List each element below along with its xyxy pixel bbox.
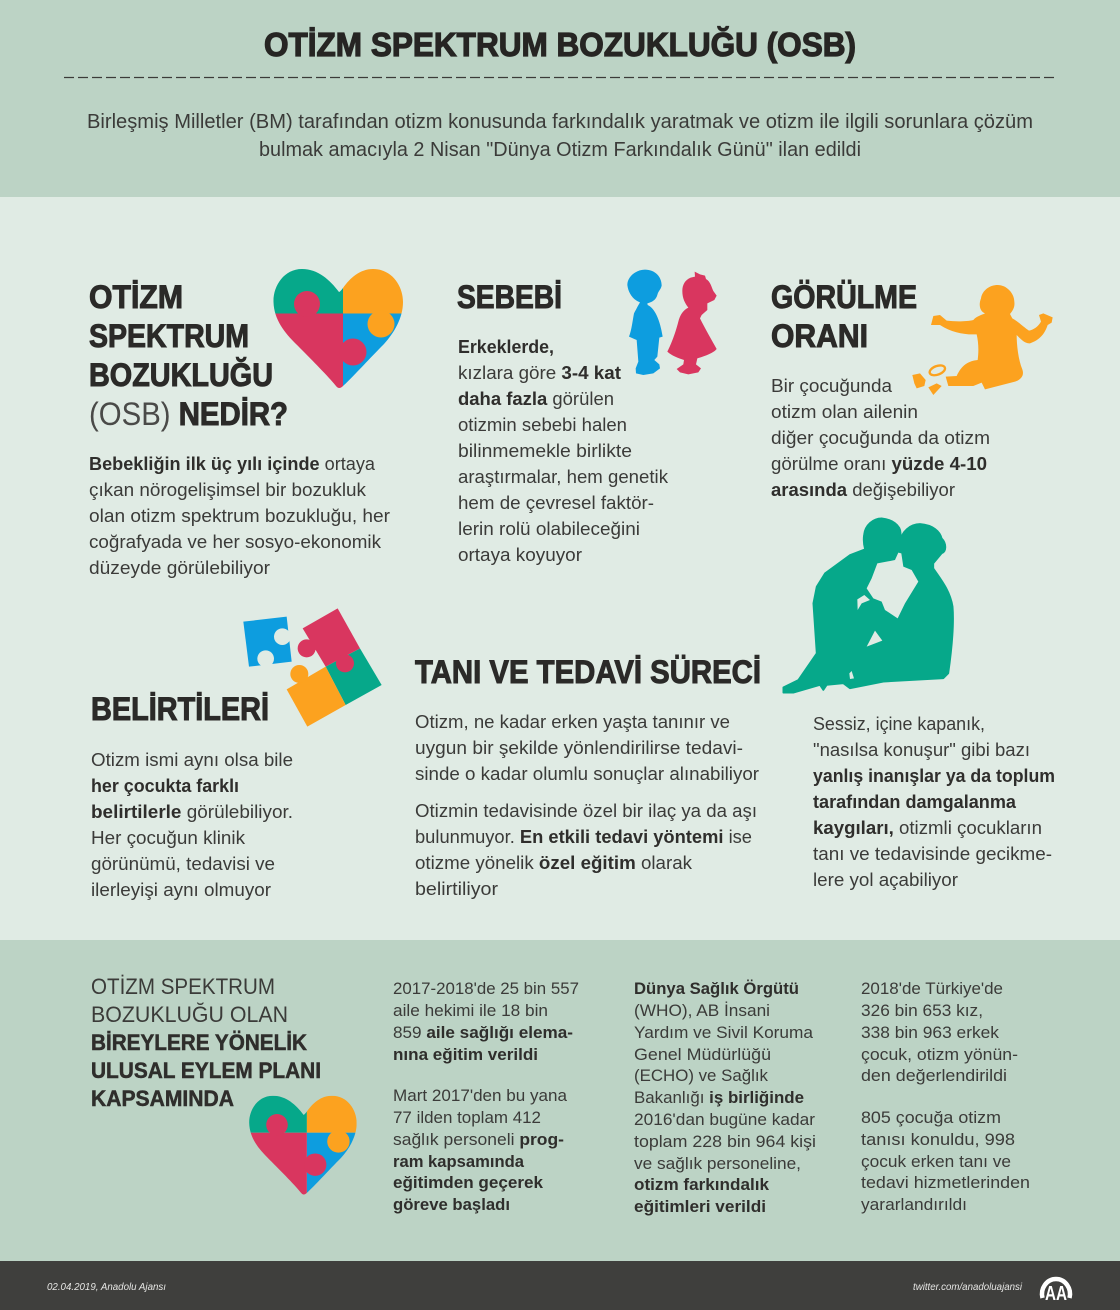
- text: sebebi: [458, 336, 669, 565]
- heading: tanı ve tedavi süreci: TANI VE TEDAVİ SÜRECİ: [415, 654, 761, 690]
- text: yanlış inanışlar: "nasılsa konuşur" gibi bazı: [813, 739, 1030, 760]
- text: türkiye değerlendirme: çocuk erken tanı ve: [861, 1153, 1011, 1171]
- text: görülme oranı: arasında değişebiliyor: [771, 479, 955, 500]
- text: sebebi: lerin rolü olabileceğini: [458, 518, 640, 539]
- text: sebebi: Erkeklerde,: [458, 336, 554, 357]
- heading: ulusal eylem planı: KAPSAMINDA: [91, 1086, 234, 1111]
- heading: OSB nedir: SPEKTRUM: [89, 318, 249, 354]
- text: türkiye değerlendirme: 2018'de Türkiye'de: [861, 980, 1003, 998]
- text: iş birliği eğitimleri: Dünya Sağlık Örgütü: [634, 979, 799, 998]
- text: eğitim verilen hekimler: 859 aile sağlığı elema-: [393, 1024, 573, 1042]
- text: iş birliği eğitimleri: (ECHO) ve Sağlık: [634, 1067, 769, 1085]
- text: belirtileri: Otizm ismi aynı olsa bile: [91, 749, 293, 770]
- text: sebebi: hem de çevresel faktör-: [458, 492, 654, 513]
- heading: görülme oranı: ORANI: [771, 318, 868, 354]
- title: OTİZM SPEKTRUM BOZUKLUĞU (OSB): [264, 26, 856, 63]
- text: eğitim verilen hekimler: 77 ilden toplam 412: [393, 1109, 541, 1127]
- text: iş birliği eğitimleri: otizm farkındalık: [634, 1176, 770, 1194]
- text: OSB nedir: Bebekliğin ilk üç yılı içinde ortaya: [89, 453, 376, 474]
- icon: AA logo: [1042, 1279, 1070, 1305]
- intro text: Birleşmiş Milletler (BM) tarafından otizm konusunda farkındalık yaratmak ve otizm ile ilgili sorunlara çözüm: [87, 111, 1033, 133]
- text: sebebi: otizmin sebebi halen: [458, 414, 627, 435]
- text: iş birliği eğitimleri: Yardım ve Sivil Koruma: [634, 1024, 814, 1042]
- intro text: [87, 111, 1033, 161]
- text: iş birliği eğitimleri: ve sağlık personeline,: [634, 1155, 801, 1173]
- text: türkiye değerlendirme: tedavi hizmetlerinden: [861, 1174, 1030, 1192]
- text: türkiye değerlendirme: 338 bin 963 erkek: [861, 1024, 1000, 1042]
- text: tanı ve tedavi: [415, 711, 759, 899]
- panel: footer: [0, 1261, 1120, 1310]
- text: sebebi: bilinmemekle birlikte: [458, 440, 632, 461]
- text: belirtileri: görünümü, tedavisi ve: [91, 853, 275, 874]
- text: iş birliği eğitimleri: toplam 228 bin 964 kişi: [634, 1133, 816, 1151]
- text: iş birliği eğitimleri: 2016'dan bugüne kadar: [634, 1111, 816, 1129]
- text: türkiye değerlendirme: den değerlendirildi: [861, 1067, 1007, 1085]
- text: tanı ve tedavi: sinde o kadar olumlu sonuçlar alınabiliyor: [415, 763, 759, 784]
- text: sebebi: kızlara göre 3-4 kat: [458, 362, 621, 383]
- text: OSB nedir: olan otizm spektrum bozukluğu, her: [89, 505, 390, 526]
- text: eğitim verilen hekimler: nına eğitim verildi: [393, 1046, 538, 1064]
- text: türkiye değerlendirme: [861, 980, 1030, 1214]
- text: eğitim verilen hekimler: 2017-2018'de 25 bin 557: [393, 980, 579, 998]
- text: belirtileri: Her çocuğun klinik: [91, 827, 246, 848]
- heading: sebebi: SEBEBİ: [457, 279, 562, 315]
- text: görülme oranı: görülme oranı yüzde 4-10: [771, 453, 987, 474]
- text: iş birliği eğitimleri: Bakanlığı iş birliğinde: [634, 1089, 804, 1107]
- text: tanı ve tedavi: bulunmuyor. En etkili tedavi yöntemi ise: [415, 826, 752, 847]
- text: OSB nedir: coğrafyada ve her sosyo-ekonomik: [89, 531, 382, 552]
- text: eğitim verilen hekimler: ram kapsamında: [393, 1153, 525, 1171]
- text: iş birliği eğitimleri: [634, 979, 816, 1216]
- icon: girl silhouette: [667, 272, 717, 374]
- panel: bottom band background: [0, 940, 1120, 1261]
- text: yanlış inanışlar: lere yol açabiliyor: [813, 869, 958, 890]
- text: eğitim verilen hekimler: [393, 980, 579, 1214]
- panel: main background: [0, 197, 1120, 940]
- icon: puzzle heart: [274, 269, 403, 388]
- text: yanlış inanışlar: kaygıları, otizmli çocukların: [813, 817, 1042, 838]
- text: iş birliği eğitimleri: (WHO), AB İnsani: [634, 1001, 770, 1020]
- heading: OSB nedir: (OSB) NEDİR?: [89, 396, 288, 432]
- text: belirtileri: her çocukta farklı: [91, 775, 239, 796]
- text: tanı ve tedavi: Otizm, ne kadar erken yaşta tanınır ve: [415, 711, 730, 732]
- footer twitter handle: twitter.com/anadoluajansi: [913, 1282, 1023, 1293]
- text: türkiye değerlendirme: tanısı konuldu, 998: [861, 1131, 1015, 1149]
- text: eğitim verilen hekimler: aile hekimi ile 18 bin: [393, 1002, 548, 1020]
- text: sebebi: araştırmalar, hem genetik: [458, 466, 669, 487]
- text: yanlış inanışlar: tarafından damgalanma: [813, 791, 1017, 812]
- text: eğitim verilen hekimler: sağlık personeli prog-: [393, 1131, 564, 1149]
- heading: belirtileri: BELİRTİLERİ: [91, 691, 269, 727]
- heading: OSB nedir: BOZUKLUĞU: [89, 357, 273, 393]
- heading: görülme oranı: [771, 279, 917, 354]
- icon: baby silhouette with toys: [912, 285, 1053, 395]
- heading: görülme oranı: GÖRÜLME: [771, 279, 917, 315]
- text: türkiye değerlendirme: 326 bin 653 kız,: [861, 1002, 983, 1020]
- text: tanı ve tedavi: belirtiliyor: [415, 878, 498, 899]
- heading: ulusal eylem planı: [91, 974, 321, 1111]
- text: iş birliği eğitimleri: Genel Müdürlüğü: [634, 1046, 771, 1064]
- text: belirtileri: belirtilerle görülebiliyor.: [91, 801, 293, 822]
- text: OSB nedir: düzeyde görülebiliyor: [89, 557, 270, 578]
- heading: ulusal eylem planı: OTİZM SPEKTRUM: [91, 974, 275, 999]
- text: tanı ve tedavi: otizme yönelik özel eğitim olarak: [415, 852, 693, 873]
- text: tanı ve tedavi: uygun bir şekilde yönlendirilirse tedavi-: [415, 737, 743, 758]
- icon: AA logo: AA: [1045, 1283, 1067, 1305]
- text: yanlış inanışlar: [813, 713, 1055, 890]
- text: OSB nedir: [89, 453, 390, 578]
- text: belirtileri: [91, 749, 293, 900]
- icon: small puzzle heart: [249, 1096, 357, 1194]
- text: sebebi: daha fazla görülen: [458, 388, 614, 409]
- text: türkiye değerlendirme: yararlandırıldı: [861, 1196, 967, 1214]
- text: OSB nedir: çıkan nörogelişimsel bir bozukluk: [89, 479, 367, 500]
- text: görülme oranı: otizm olan ailenin: [771, 401, 918, 422]
- heading: ulusal eylem planı: BİREYLERE YÖNELİK: [91, 1030, 307, 1055]
- text: belirtileri: ilerleyişi aynı olmuyor: [91, 879, 271, 900]
- footer date and source: 02.04.2019, Anadolu Ajansı: [47, 1282, 166, 1293]
- text: görülme oranı: diğer çocuğunda da otizm: [771, 427, 990, 448]
- text: yanlış inanışlar: yanlış inanışlar ya da toplum: [813, 765, 1055, 786]
- heading: ulusal eylem planı: ULUSAL EYLEM PLANI: [91, 1058, 321, 1083]
- text: eğitim verilen hekimler: eğitimden geçerek: [393, 1174, 544, 1192]
- heading: OSB nedir: [89, 279, 288, 432]
- text: tanı ve tedavi: Otizmin tedavisinde özel bir ilaç ya da aşı: [415, 800, 757, 821]
- heading: ulusal eylem planı: BOZUKLUĞU OLAN: [91, 1002, 288, 1027]
- text: görülme oranı: Bir çocuğunda: [771, 375, 893, 396]
- text: yanlış inanışlar: tanı ve tedavisinde gecikme-: [813, 843, 1052, 864]
- text: görülme oranı: [771, 375, 990, 500]
- panel: header: [0, 0, 1120, 197]
- text: sebebi: ortaya koyuyor: [458, 544, 582, 565]
- text: eğitim verilen hekimler: Mart 2017'den bu yana: [393, 1087, 568, 1105]
- text: iş birliği eğitimleri: eğitimleri verildi: [634, 1198, 766, 1216]
- text: yanlış inanışlar: Sessiz, içine kapanık,: [813, 713, 985, 734]
- text: eğitim verilen hekimler: göreve başladı: [393, 1196, 510, 1214]
- icon: boy silhouette: [627, 270, 663, 375]
- text: türkiye değerlendirme: 805 çocuğa otizm: [861, 1109, 1001, 1127]
- text: türkiye değerlendirme: çocuk, otizm yönün-: [861, 1046, 1018, 1064]
- intro text: bulmak amacıyla 2 Nisan "Dünya Otizm Farkındalık Günü" ilan edildi: [259, 139, 861, 161]
- heading: OSB nedir: OTİZM: [89, 279, 183, 315]
- icon: couple silhouette: [783, 518, 953, 693]
- icon: puzzle pieces: [243, 608, 382, 727]
